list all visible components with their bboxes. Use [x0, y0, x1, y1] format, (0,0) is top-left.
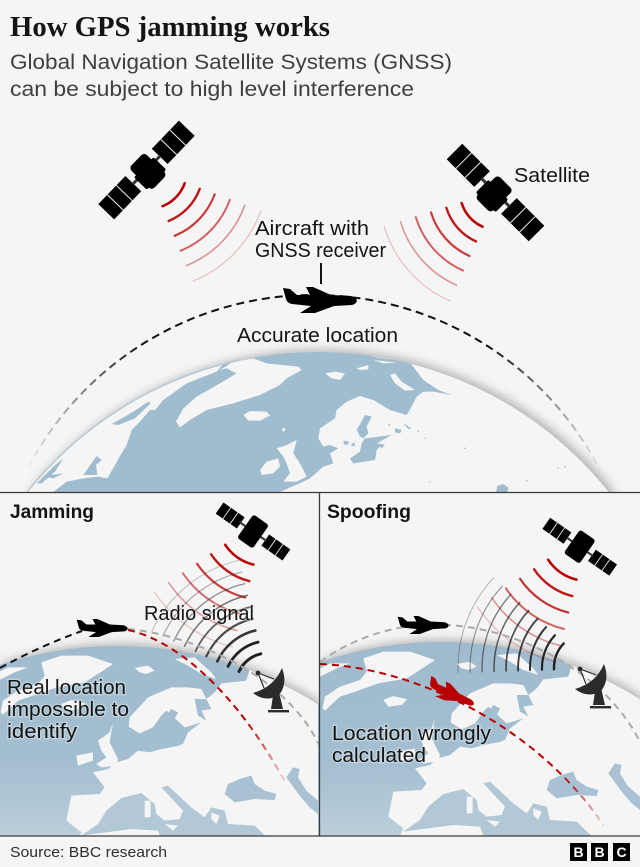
globe limb	[27, 360, 240, 492]
heading: jamming: Jamming	[10, 502, 94, 523]
globe with map	[27, 347, 609, 492]
flight paths	[0, 629, 320, 782]
icon: aircraft	[77, 619, 128, 637]
label: location wrongly calculated: calculated	[332, 745, 426, 767]
label: radio signal: Radio signal	[144, 603, 254, 625]
source: Source: BBC research	[10, 844, 167, 861]
label: satellite: Satellite	[514, 165, 590, 187]
icon: aircraft	[398, 616, 449, 634]
globe shadow	[31, 350, 613, 500]
label: aircraft with GNSS receiver: Aircraft with	[255, 218, 369, 240]
signal arcs left	[163, 183, 261, 281]
label: real location impossible: identify	[7, 721, 77, 743]
heading: spoofing: Spoofing	[327, 502, 411, 523]
label: aircraft with GNSS receiver: GNSS receiver	[255, 240, 386, 262]
spoofing signal arcs	[458, 578, 564, 673]
label: accurate location: Accurate location	[237, 325, 398, 347]
subtitle: can be subject to high level interference	[10, 78, 414, 101]
radio signal arcs	[155, 545, 253, 647]
logo: BBC: B	[573, 844, 584, 860]
icon: false aircraft	[430, 676, 474, 706]
icon: satellite right	[442, 142, 546, 246]
label: real location impossible	[7, 677, 129, 743]
globe shadow	[0, 638, 319, 705]
globe map	[0, 644, 319, 840]
icon: dish	[253, 668, 289, 712]
panel: jamming	[0, 496, 322, 840]
icon: dish	[575, 664, 611, 708]
label: real location impossible: impossible to	[7, 699, 129, 721]
logo: BBC	[570, 843, 630, 861]
label: location wrongly calculated	[332, 723, 491, 767]
pointer line	[320, 263, 322, 284]
subtitle	[10, 51, 452, 101]
subtitle: Global Navigation Satellite Systems (GNSS)	[10, 51, 452, 74]
label: location wrongly calculated: Location wrongly	[332, 723, 491, 745]
logo: BBC: C	[616, 844, 627, 860]
panel: how it works, accurate location	[27, 295, 613, 500]
jamming signal arcs	[152, 560, 261, 672]
signal arcs right	[384, 203, 482, 301]
accurate flight path	[28, 295, 600, 470]
title: How GPS jamming works	[10, 11, 330, 43]
label: aircraft with GNSS receiver	[255, 218, 386, 262]
panel: spoofing	[320, 502, 640, 840]
logo: BBC: B	[594, 844, 605, 860]
icon: satellite	[538, 512, 621, 582]
radio signal arcs	[478, 560, 576, 662]
label: real location impossible: Real location	[7, 677, 126, 699]
flight paths	[320, 624, 640, 826]
globe shadow	[320, 634, 640, 699]
icon: satellite	[211, 496, 295, 567]
icon: aircraft	[283, 287, 357, 313]
icon: satellite left	[96, 119, 200, 224]
globe map	[320, 640, 640, 836]
